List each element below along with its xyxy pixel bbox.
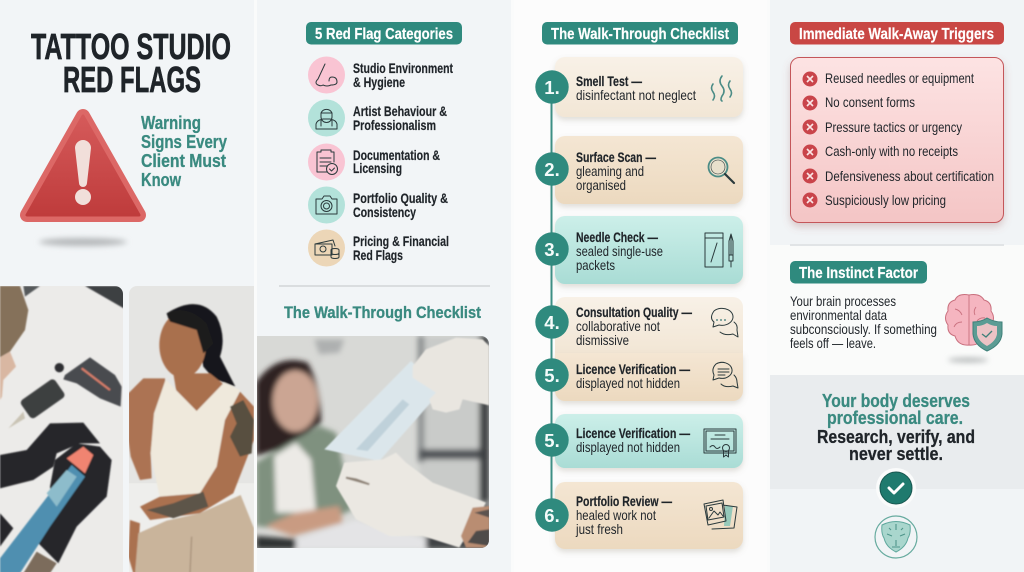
icon: leopard logo (875, 516, 917, 558)
step 2: surface scan: Surface Scan — (576, 149, 656, 165)
callout: triggers list (790, 58, 1004, 222)
title: RED FLAGS (63, 59, 201, 100)
category: portfolio: Consistency (353, 204, 416, 220)
category: documentation (308, 144, 440, 180)
heading: The Walk-Through Checklist pill (542, 22, 738, 44)
closing message: never settle. (849, 443, 943, 464)
category: artist behaviour: Artist Behaviour & (353, 103, 447, 119)
title (31, 26, 231, 100)
step 6: portfolio review: healed work not (576, 507, 656, 523)
photo: gloved hands with tattoo machine (0, 280, 127, 572)
trigger 6: Suspiciously low pricing (825, 192, 946, 208)
text: instinct explanation: Your brain processes (790, 293, 896, 309)
subtitle: Know (141, 170, 182, 190)
category: portfolio: Portfolio Quality & (353, 190, 448, 206)
text: instinct explanation: environmental data (790, 307, 887, 323)
step 2: surface scan: gleaming and (576, 163, 644, 179)
step 1: smell test: disinfectant not neglect (576, 87, 696, 103)
step 6: portfolio review: Portfolio Review — (576, 493, 672, 509)
step 3: needle check: sealed single-use (576, 243, 663, 259)
step 3: needle check: Needle Check — (576, 229, 658, 245)
step 3: needle check: 3. (544, 239, 560, 260)
step 5: licence verification (tan): displayed not hidden (576, 375, 680, 391)
heading: Immediate Walk-Away Triggers (790, 22, 1004, 44)
subtitle (141, 113, 227, 190)
closing message: Your body deserves (822, 390, 970, 411)
step 4: consultation quality: 4. (544, 312, 560, 333)
trigger 1: Reused needles or equipment (825, 70, 974, 86)
timeline line (550, 87, 552, 517)
step 6: portfolio review: just fresh (575, 521, 623, 537)
category: artist behaviour: Professionalism (353, 117, 436, 133)
step 1: smell test: Smell Test — (576, 73, 642, 89)
heading: The Walk-Through Checklist: The Walk-Through Checklist (284, 303, 481, 322)
step 3: needle check: packets (576, 257, 615, 273)
step 2: surface scan: 2. (544, 159, 560, 180)
subtitle: Warning (141, 113, 201, 133)
closing message: professional care. (827, 407, 963, 428)
step 4: consultation quality: collaborative not (576, 318, 660, 334)
category: studio environment: Studio Environment (353, 60, 453, 76)
heading: The Instinct Factor (790, 261, 927, 284)
step 5: licence verification (tan): 5. (544, 365, 560, 386)
trigger 4 (802, 143, 958, 160)
step 4: consultation quality (535, 297, 743, 353)
category: pricing: Pricing & Financial (353, 233, 449, 249)
panel: title column (0, 0, 257, 572)
step 4: consultation quality: dismissive (576, 332, 629, 348)
heading: The Walk-Through Checklist pill: The Walk-Through Checklist (551, 26, 730, 43)
step 1: smell test: 1. (544, 77, 560, 98)
category: artist behaviour (308, 100, 447, 136)
step 5: licence verification (tan): Licence Verification — (576, 361, 690, 377)
category: documentation: Documentation & (353, 147, 440, 163)
category: pricing (308, 230, 449, 266)
step 5: licence verification (tan) (535, 353, 743, 401)
step 6: portfolio review (535, 482, 743, 549)
trigger 2 (802, 94, 915, 110)
photo: smiling client with tattooed arm (128, 285, 257, 572)
heading: 5 Red Flag Categories (306, 22, 462, 44)
icon: check badge (876, 468, 916, 508)
text: instinct explanation: feels off — leave. (790, 335, 876, 351)
closing message (817, 390, 975, 464)
subtitle: Signs Every (141, 132, 227, 152)
category: pricing: Red Flags (353, 247, 403, 263)
category: documentation: Licensing (353, 160, 402, 176)
trigger 1 (802, 70, 974, 86)
trigger 4: Cash-only with no receipts (825, 143, 958, 159)
step 6: portfolio review: 6. (544, 505, 560, 526)
step 5: licence verification (teal) (535, 414, 743, 468)
category: portfolio (308, 186, 448, 224)
icon: warning triangle (27, 116, 139, 246)
closing message: Research, verify, and (817, 426, 975, 447)
heading: 5 Red Flag Categories: 5 Red Flag Categories (315, 26, 453, 43)
trigger 2: No consent forms (825, 94, 915, 110)
photo: gloved hands holding sealed needle packet (256, 336, 489, 549)
icon: brain with shield (946, 295, 1002, 362)
step 2: surface scan: organised (576, 177, 626, 193)
title: TATTOO STUDIO (31, 26, 231, 67)
subtitle: Client Must (141, 151, 226, 171)
category: studio environment (308, 56, 453, 94)
panel: walk-away triggers and closing (770, 0, 1024, 572)
step 3: needle check (535, 216, 743, 284)
text: instinct explanation (790, 293, 937, 351)
text: instinct explanation: subconsciously. If something (790, 321, 937, 337)
step 5: licence verification (teal): 5. (544, 430, 560, 451)
category: studio environment: & Hygiene (353, 74, 405, 90)
panel: walk-through checklist (514, 0, 767, 572)
step 4: consultation quality: Consultation Quality — (576, 304, 692, 320)
step 2: surface scan (535, 136, 743, 204)
step 5: licence verification (teal): displayed not hidden (576, 439, 680, 455)
heading: The Instinct Factor: The Instinct Factor (799, 265, 918, 282)
step 5: licence verification (teal): Licence Verification — (576, 425, 690, 441)
panel: red flag categories (257, 22, 490, 548)
trigger 3: Pressure tactics or urgency (825, 119, 962, 135)
step 1: smell test (535, 57, 743, 117)
